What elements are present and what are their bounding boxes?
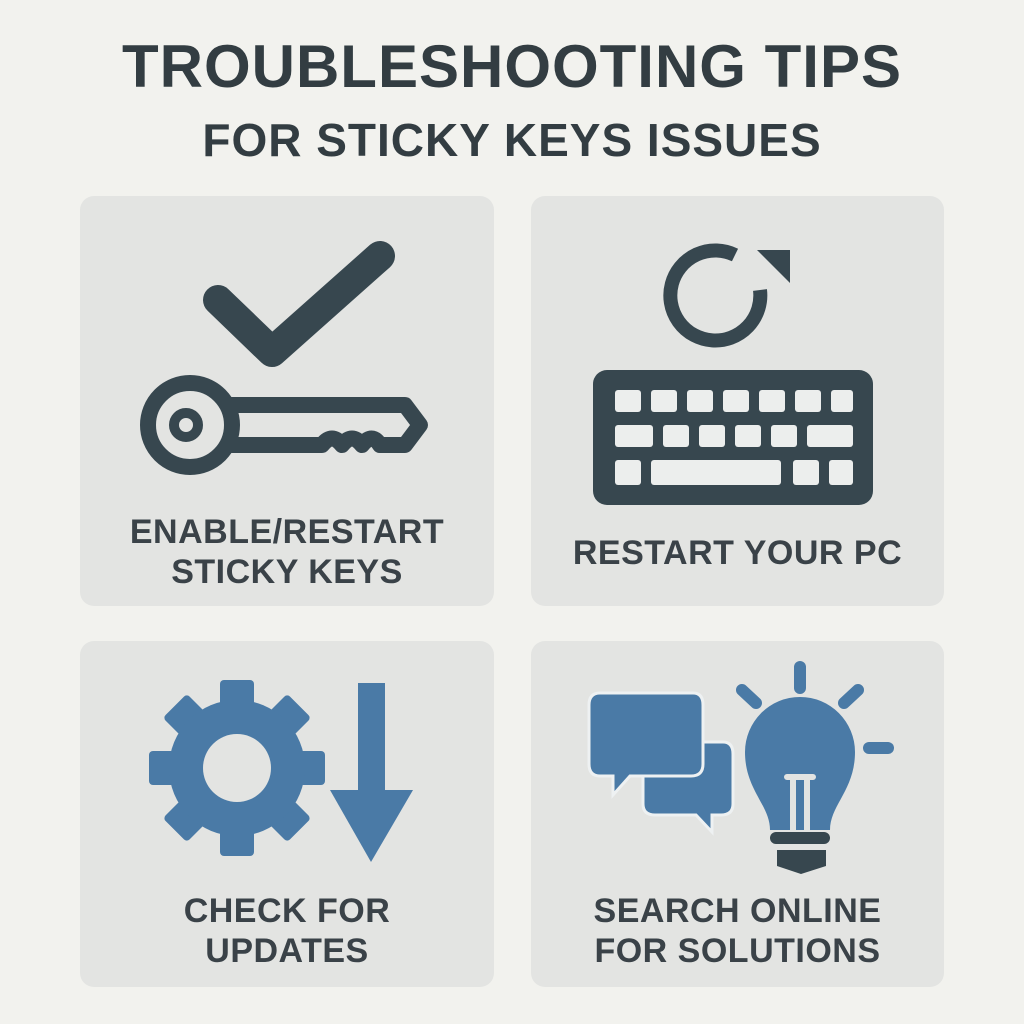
subtitle: FOR STICKY KEYS ISSUES — [202, 114, 822, 166]
icon: down arrow — [330, 683, 413, 862]
icon: chat bubbles — [589, 693, 733, 832]
panel: search online — [531, 641, 944, 987]
label: enable: ENABLE/RESTART — [130, 513, 444, 551]
label: updates: UPDATES — [205, 932, 369, 970]
title: TROUBLESHOOTING TIPS — [122, 33, 902, 100]
label: search: SEARCH ONLINE — [594, 892, 881, 930]
icon: checkmark — [218, 256, 380, 352]
icon: key — [148, 383, 420, 467]
panel: enable sticky keys — [80, 196, 494, 606]
label: search — [594, 892, 881, 970]
icon: keyboard — [593, 370, 873, 505]
label: enable: STICKY KEYS — [171, 553, 403, 591]
icon: refresh arrow — [670, 250, 790, 340]
label: search: FOR SOLUTIONS — [594, 932, 881, 970]
label: updates: CHECK FOR — [184, 892, 390, 930]
panel: restart pc — [531, 196, 944, 606]
label: enable — [130, 513, 444, 591]
label: restart: RESTART YOUR PC — [573, 534, 902, 572]
panel: check updates — [80, 641, 494, 987]
label: updates — [184, 892, 390, 970]
icon: lightbulb — [742, 667, 888, 874]
icon: gear — [149, 680, 325, 856]
